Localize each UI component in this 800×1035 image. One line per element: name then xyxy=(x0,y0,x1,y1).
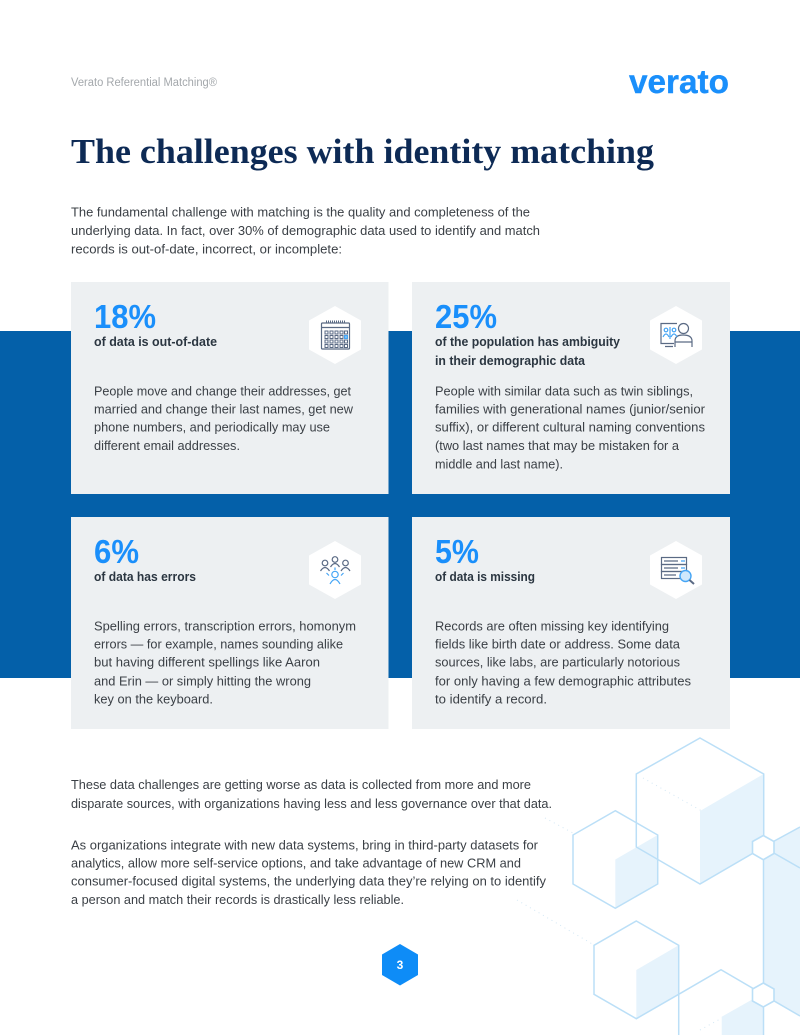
closing paragraph 1: disparate sources, with organizations having less and less governance over that data. xyxy=(71,796,552,811)
stat: 18%: 18% xyxy=(94,298,156,335)
body text: People with similar data such as twin siblings, xyxy=(435,384,693,398)
body text: key on the keyboard. xyxy=(94,692,213,706)
page number badge: 3 xyxy=(397,958,404,972)
icon: records with magnifier xyxy=(650,541,702,599)
panel: 6% errors xyxy=(71,517,388,729)
blue background band xyxy=(0,331,800,678)
body text: (two last names that may be mistaken for a xyxy=(435,438,680,453)
stat: 25%: 25% xyxy=(435,298,497,335)
stat label: of data is missing xyxy=(435,569,535,584)
body text: middle and last name). xyxy=(435,456,563,472)
logo: verato: verato xyxy=(629,63,729,100)
body text xyxy=(435,384,706,472)
stat: 6%: 6% xyxy=(94,533,139,570)
body text: sources, like labs, are particularly notorious xyxy=(435,654,680,670)
body text: People move and change their addresses, get xyxy=(94,384,351,398)
body text: suffix), or different cultural naming conventions xyxy=(435,420,706,434)
body text: Spelling errors, transcription errors, homonym xyxy=(94,618,356,634)
closing paragraph 2: a person and match their records is drastically less reliable. xyxy=(71,892,404,907)
stat label: of data is out-of-date xyxy=(94,334,217,349)
body text: families with generational names (junior/senior xyxy=(435,402,706,416)
body text xyxy=(435,618,691,706)
closing paragraph 1 xyxy=(71,777,552,811)
page number badge xyxy=(382,944,418,986)
body text xyxy=(94,618,356,706)
intro paragraph: records is out-of-date, incorrect, or incomplete: xyxy=(71,242,342,256)
closing paragraph 2: analytics, allow more self-service options, and take advantage of new CRM and xyxy=(71,856,521,870)
body text: phone numbers, and periodically may use xyxy=(94,420,330,434)
closing paragraph 2 xyxy=(71,838,546,907)
icon: calendar xyxy=(309,306,361,364)
body text: for only having a few demographic attributes xyxy=(435,674,691,688)
card background xyxy=(412,282,730,494)
closing paragraph 2: As organizations integrate with new data systems, bring in third-party datasets for xyxy=(71,838,539,852)
body text: but having different spellings like Aaron xyxy=(94,654,320,670)
stat label: in their demographic data xyxy=(435,353,586,368)
background hexagon pattern xyxy=(517,738,800,1035)
card background xyxy=(412,517,730,729)
stat label: of data has errors xyxy=(94,569,196,584)
body text: to identify a record. xyxy=(435,692,547,706)
stat label xyxy=(435,334,621,368)
body text: Records are often missing key identifying xyxy=(435,618,669,634)
stat label: of the population has ambiguity xyxy=(435,334,621,349)
body text: different email addresses. xyxy=(94,438,240,453)
panel: 5% missing xyxy=(412,517,730,729)
card background xyxy=(71,282,388,494)
closing paragraph 2: consumer-focused digital systems, the underlying data they’re relying on to identify xyxy=(71,874,546,888)
body text: married and change their last names, get new xyxy=(94,402,354,416)
intro paragraph: underlying data. In fact, over 30% of demographic data used to identify and match xyxy=(71,223,540,238)
body text: and Erin — or simply hitting the wrong xyxy=(94,674,311,688)
icon: group of people xyxy=(309,541,361,599)
body text: errors — for example, names sounding alike xyxy=(94,636,343,652)
body text: fields like birth date or address. Some data xyxy=(435,636,681,652)
closing paragraph 1: These data challenges are getting worse as data is collected from more and more xyxy=(71,777,531,792)
card background xyxy=(71,517,388,729)
intro paragraph: The fundamental challenge with matching is the quality and completeness of the xyxy=(71,204,530,220)
running header: Verato Referential Matching® xyxy=(71,77,218,89)
title: The challenges with identity matching xyxy=(71,132,655,171)
stat: 5%: 5% xyxy=(435,533,479,570)
panel: 25% ambiguity xyxy=(412,282,730,494)
body text xyxy=(94,384,354,453)
panel: 18% out-of-date xyxy=(71,282,388,494)
icon: person at monitor xyxy=(650,306,702,364)
intro paragraph xyxy=(71,204,540,256)
